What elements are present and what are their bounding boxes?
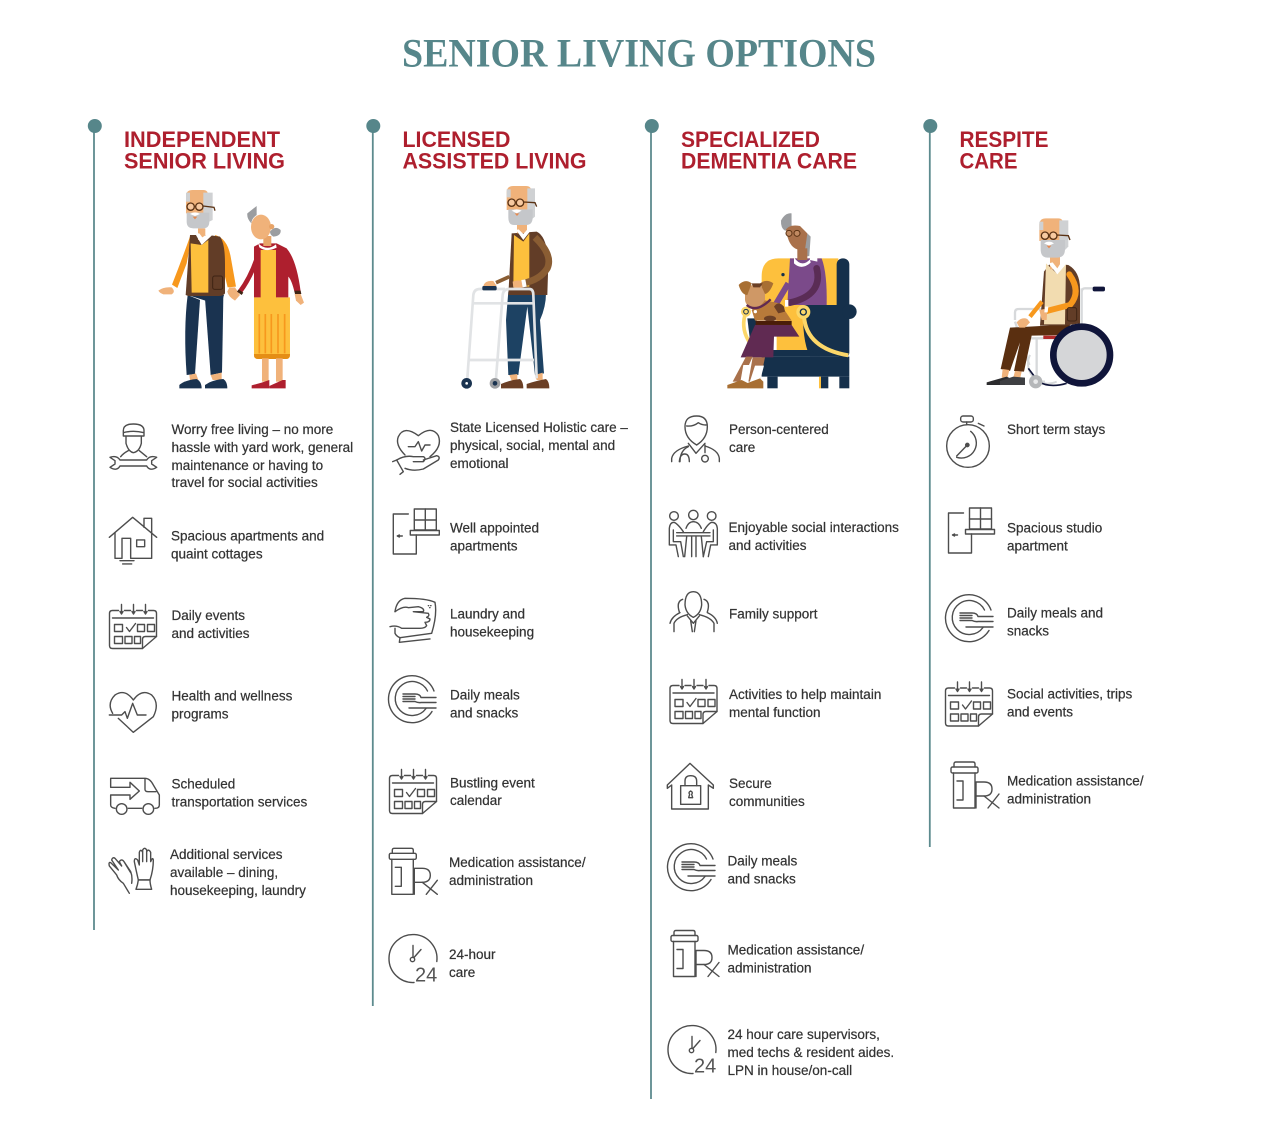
text: laundry: Laundry and — [450, 606, 525, 622]
text: health and wellness: programs — [172, 706, 229, 722]
text: secure communities: Secure — [729, 776, 772, 791]
text: well appointed: Well appointed — [450, 520, 539, 536]
text: well appointed: apartments — [450, 538, 518, 554]
text: mental function: mental function — [729, 705, 821, 720]
icon: doctor — [672, 416, 719, 462]
text: medication: Medication assistance/ — [1007, 774, 1144, 788]
timeline marker — [923, 119, 937, 847]
icon: locked house — [667, 763, 713, 809]
icon: 24 hour clock — [389, 935, 437, 986]
icon: calendar — [390, 770, 436, 814]
text: state licensed: emotional — [450, 456, 509, 471]
icon: heart with pulse — [109, 693, 156, 732]
text: additional services: Additional services — [170, 847, 283, 862]
illustration: senior couple — [158, 190, 304, 388]
text: 24-hour care: 24-hour — [449, 947, 496, 962]
text: daily meals: and snacks — [450, 706, 519, 720]
text: family support: Family support — [729, 606, 818, 622]
illustration: senior man in wheelchair — [987, 218, 1110, 388]
text: medication: administration — [449, 873, 533, 888]
text: person-centered care: care — [729, 440, 755, 455]
text: daily meals: and snacks — [728, 872, 796, 886]
icon: calendar — [110, 604, 156, 648]
icon: house — [109, 517, 157, 564]
icon: hand with cloth — [390, 598, 436, 642]
panel: independent senior living — [88, 119, 353, 930]
text: transportation: Scheduled — [172, 776, 235, 792]
icon: calendar — [670, 680, 717, 724]
icon: people around table — [669, 510, 717, 557]
icon: calendar — [946, 682, 992, 726]
text: daily meals: Daily meals — [450, 688, 520, 702]
text: bustling event calendar: calendar — [450, 793, 502, 808]
text: person-centered care: Person-centered — [729, 422, 829, 437]
heading: SPECIALIZED — [681, 127, 820, 152]
text: health and wellness: Health and wellness — [172, 688, 293, 704]
heading: SENIOR LIVING — [124, 148, 285, 174]
text: additional services: available – dining, — [170, 865, 278, 880]
icon: mechanic with wrench — [110, 424, 157, 469]
icon: apartment door and window — [948, 508, 994, 553]
text: spacious studio: apartment — [1007, 538, 1068, 554]
text: spacious apartments: quaint cottages — [171, 546, 263, 562]
text: 24-hour care: care — [449, 965, 475, 980]
icon: plate and fork — [388, 676, 436, 723]
text: daily events: Daily events — [172, 608, 245, 623]
icon: apartment door and window — [393, 509, 439, 554]
text: daily events: and activities — [172, 626, 250, 641]
text: short term stays: Short term stays — [1007, 422, 1106, 437]
text: medication: administration — [1007, 792, 1091, 806]
text: 24 hour supervisors: med techs & resident aides. — [728, 1045, 894, 1060]
text: 24 hour supervisors: LPN in house/on-call — [728, 1063, 852, 1078]
heading: CARE — [960, 148, 1018, 174]
heading: DEMENTIA CARE — [681, 148, 857, 174]
text: additional services: housekeeping, laundry — [170, 883, 306, 898]
text: bustling event calendar: Bustling event — [450, 776, 535, 790]
text: daily meals: Daily meals and — [1007, 606, 1103, 620]
illustration: senior man with walker — [461, 186, 549, 389]
text: daily meals: snacks — [1007, 624, 1049, 638]
text: state licensed: physical, social, mental and — [450, 438, 615, 453]
icon: prescription — [671, 930, 719, 976]
text: state licensed: State Licensed Holistic care – — [450, 420, 628, 435]
timeline marker — [366, 119, 380, 1006]
text: worry free living: Worry free living – no more — [172, 422, 333, 437]
panel: specialized dementia care — [645, 119, 899, 1099]
text: enjoyable social interactions: Enjoyable social interactions — [728, 520, 899, 535]
text: worry free living: maintenance or having to — [172, 458, 323, 473]
heading: RESPITE — [960, 127, 1048, 152]
text: daily meals: Daily meals — [728, 854, 798, 868]
text: laundry: housekeeping — [450, 624, 534, 640]
text: worry free living: travel for social activities — [172, 475, 318, 490]
icon: prescription — [951, 762, 999, 808]
icon: transport van — [111, 778, 159, 814]
text: social activities: and events — [1007, 704, 1073, 720]
icon: plate and fork — [667, 844, 715, 891]
text: spacious studio: Spacious studio — [1007, 520, 1102, 536]
text: spacious apartments: Spacious apartments and — [171, 528, 324, 544]
text: 24 hour supervisors: 24 hour care supervisors, — [728, 1027, 880, 1042]
text: mental function: Activities to help maintain — [729, 687, 881, 702]
text: medication: Medication assistance/ — [449, 855, 586, 870]
text: transportation: transportation services — [172, 794, 308, 810]
panel: respite care — [923, 119, 1144, 847]
text: secure communities: communities — [729, 794, 805, 809]
heading: INDEPENDENT — [124, 127, 281, 152]
icon: prescription — [389, 848, 437, 894]
heading: ASSISTED LIVING — [402, 148, 586, 174]
icon: family group — [670, 592, 717, 632]
title: SENIOR LIVING OPTIONS — [402, 30, 876, 76]
icon: stopwatch — [947, 416, 989, 467]
heading: LICENSED — [402, 127, 510, 152]
text: social activities: Social activities, trips — [1007, 686, 1133, 702]
text: medication: administration — [728, 960, 812, 976]
icon: plate and fork — [945, 595, 993, 642]
panel: licensed assisted living — [366, 119, 628, 1006]
text: medication: Medication assistance/ — [728, 942, 864, 958]
timeline marker — [88, 119, 102, 930]
icon: gloves — [109, 848, 153, 893]
text: enjoyable social interactions: and activities — [728, 538, 807, 553]
timeline marker — [645, 119, 659, 1099]
illustration: senior woman with dog in armchair — [727, 212, 857, 388]
icon: heart in hand — [393, 430, 439, 474]
text: worry free living: hassle with yard work, general — [172, 440, 353, 455]
icon: 24 hour clock — [668, 1026, 716, 1078]
